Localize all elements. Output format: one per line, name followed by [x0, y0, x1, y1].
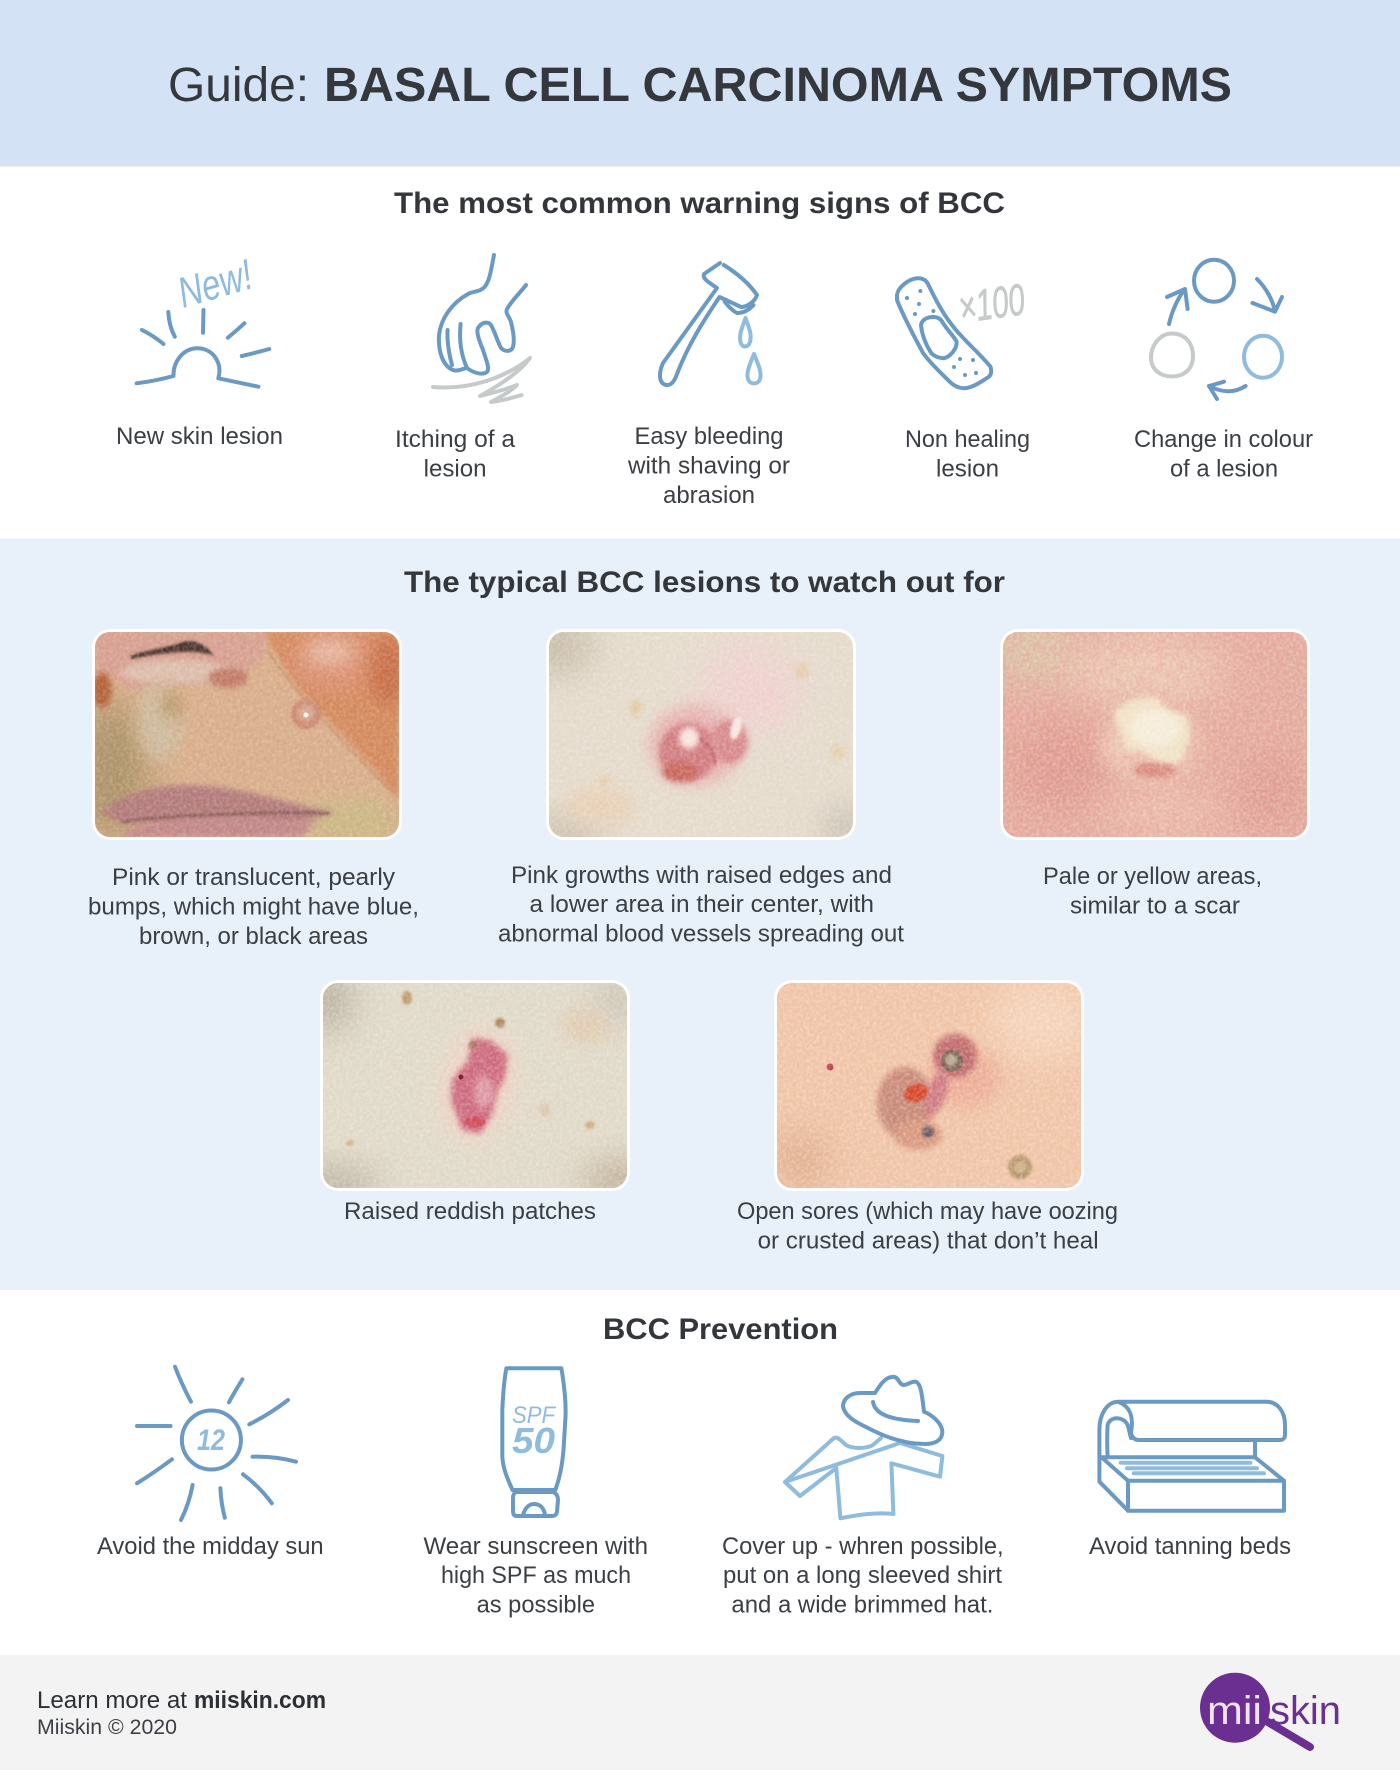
caption: abnormal blood vessels spreading out [498, 920, 904, 948]
icon: colour change cycle [1151, 260, 1282, 399]
label [1134, 426, 1313, 483]
label: lesion [936, 456, 999, 483]
lesion card: pearly bumps [72, 628, 419, 950]
photo: pale scar-like area [984, 620, 1310, 840]
label: as possible [477, 1592, 595, 1619]
icon: sun at 12 [137, 1367, 296, 1520]
photo: raised reddish patch [320, 980, 630, 1191]
warning sign: non healing [897, 275, 1030, 483]
copyright: Miiskin © 2020 [37, 1716, 177, 1739]
label [395, 426, 516, 483]
label: put on a long sleeved shirt [723, 1562, 1002, 1589]
prevention tip: midday sun [97, 1367, 324, 1560]
caption: Raised reddish patches [344, 1198, 596, 1225]
prevention tip: cover up [722, 1377, 1004, 1619]
panel: warning signs [116, 187, 1313, 509]
label: New skin lesion [116, 423, 283, 450]
lesion card: pink growths [498, 615, 904, 948]
label: Avoid the midday sun [97, 1533, 324, 1560]
prevention tip: tanning beds [1089, 1402, 1291, 1560]
warning sign: change in colour [1134, 260, 1313, 483]
logo: miiskin [1200, 1673, 1341, 1747]
icon: hat and shirt [785, 1377, 942, 1518]
icon: scratching hand [433, 255, 530, 402]
icon: new lesion [137, 251, 269, 387]
footer link text: miiskin.com [194, 1687, 326, 1714]
icon: sunscreen bottle: 50 [512, 1420, 555, 1461]
icon: bandage: ×100 [956, 275, 1028, 333]
icon: sunscreen bottle: SPF [512, 1402, 556, 1429]
caption: Open sores (which may have oozing [737, 1198, 1118, 1225]
warning sign: easy bleeding [627, 263, 790, 509]
logo: miiskin: skin [1270, 1689, 1341, 1733]
label: Non healing [905, 426, 1030, 453]
caption: Pale or yellow areas, [1043, 863, 1262, 890]
caption: bumps, which might have blue, [88, 894, 419, 920]
icon: sunscreen bottle [502, 1368, 566, 1516]
icon: sun at 12: 12 [197, 1424, 225, 1457]
header banner [0, 0, 1400, 166]
caption: Pink or translucent, pearly [112, 864, 395, 891]
label: Wear sunscreen with [424, 1533, 648, 1560]
label: Change in colour [1134, 426, 1313, 453]
icon: tanning bed [1099, 1402, 1285, 1511]
footer [0, 1655, 1400, 1770]
warning sign: itching [395, 255, 530, 483]
warning sign: new skin lesion [116, 251, 283, 450]
heading: typical lesions: The typical BCC lesions to watch out for [404, 566, 1005, 599]
heading: warning signs: The most common warning signs of BCC [394, 187, 1005, 220]
label: with shaving or [627, 452, 790, 480]
caption: or crusted areas) that don’t heal [758, 1228, 1099, 1255]
icon: razor and drops [660, 263, 761, 385]
title: BASAL CELL CARCINOMA SYMPTOMS [324, 59, 1232, 112]
footer link text: Learn more at [37, 1687, 187, 1714]
caption [1043, 863, 1262, 920]
photo: nodule beside nose and lips [72, 628, 408, 840]
panel: prevention [97, 1313, 1291, 1619]
panel: typical lesions [0, 538, 1400, 1290]
label: Easy bleeding [634, 423, 784, 450]
label [905, 426, 1030, 483]
icon: bandage [897, 275, 1028, 388]
label: lesion [424, 456, 487, 483]
lesion card: open sores [737, 980, 1118, 1255]
icon: new lesion: New! [173, 251, 258, 318]
lesion card: pale areas [984, 620, 1310, 920]
label: Avoid tanning beds [1089, 1533, 1291, 1560]
label: Itching of a [395, 426, 516, 453]
caption: Pink growths with raised edges and [511, 862, 892, 889]
label [722, 1533, 1004, 1619]
lesion card: reddish patches [320, 980, 630, 1224]
photo: pink growth on skin [546, 629, 856, 840]
label: high SPF as much [441, 1562, 631, 1589]
caption: similar to a scar [1070, 892, 1240, 920]
label [424, 1533, 648, 1619]
caption: brown, or black areas [139, 923, 368, 950]
prevention tip: sunscreen [424, 1368, 648, 1619]
caption: a lower area in their center, with [530, 891, 874, 918]
title: Guide: [168, 59, 309, 112]
label: abrasion [663, 482, 755, 509]
photo: open crusted sores [770, 980, 1090, 1191]
heading: prevention: BCC Prevention [603, 1313, 838, 1346]
label: and a wide brimmed hat. [731, 1592, 993, 1619]
label [627, 423, 790, 509]
label: of a lesion [1170, 456, 1278, 483]
caption [88, 864, 419, 950]
caption [498, 862, 904, 948]
label: Cover up - whren possible, [722, 1533, 1004, 1560]
logo: miiskin: mii [1207, 1689, 1262, 1733]
caption [737, 1198, 1118, 1255]
